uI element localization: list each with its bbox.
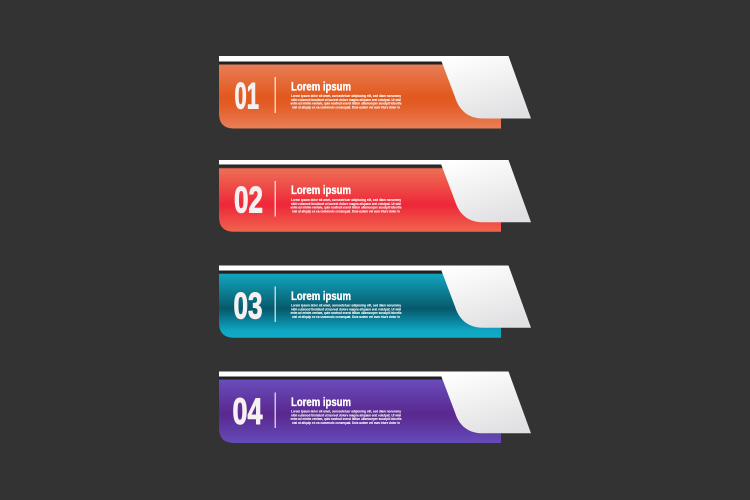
divider 01 — [274, 77, 276, 113]
white top strip 03 — [219, 266, 449, 270]
body text 01: nisl ut aliquip ex ea commodo consequat. Duis autem vel eum iriure dolor in — [292, 106, 401, 110]
white top strip 04 — [219, 372, 449, 376]
orange body 01 — [219, 64, 501, 128]
body text 03: nisl ut aliquip ex ea commodo consequat. Duis autem vel eum iriure dolor in — [292, 315, 401, 319]
body text 02: Lorem ipsum dolor sit amet, consectetuer adipiscing elit, sed diam nonummy — [291, 198, 402, 202]
heading 02: Lorem ipsum — [291, 185, 351, 197]
white flap 02 — [440, 160, 531, 222]
divider 04 — [274, 392, 276, 428]
body text 04: enim ad minim veniam, quis nostrud exerci tation ullamcorper suscipit lobortis — [290, 417, 402, 421]
dark shadow strip 03 — [219, 270, 442, 274]
panel: banner 01 — [219, 56, 531, 128]
red body 02 — [219, 168, 501, 232]
body text 01 — [290, 94, 402, 110]
body text 04: nibh euismod tincidunt ut laoreet dolore magna aliquam erat volutpat. Ut wisi — [291, 413, 401, 417]
body text 04 — [290, 410, 402, 425]
white flap 03 — [440, 266, 531, 328]
heading 03: Lorem ipsum — [291, 291, 351, 303]
body text 01: enim ad minim veniam, quis nostrud exerci tation ullamcorper suscipit lobortis — [290, 102, 402, 106]
body text 02: enim ad minim veniam, quis nostrud exerci tation ullamcorper suscipit lobortis — [290, 206, 402, 210]
dark shadow strip 04 — [219, 376, 442, 380]
white flap 04 — [440, 372, 531, 433]
number 01: 01 — [234, 76, 259, 116]
body text 01: Lorem ipsum dolor sit amet, consectetuer adipiscing elit, sed diam nonummy — [291, 94, 402, 98]
body text 02 — [290, 198, 402, 214]
divider 02 — [274, 181, 276, 216]
dark shadow strip 02 — [219, 164, 442, 166]
body text 03: nibh euismod tincidunt ut laoreet dolore magna aliquam erat volutpat. Ut wisi — [291, 307, 401, 311]
divider 03 — [274, 286, 276, 322]
teal body 03 — [219, 274, 501, 338]
body text 03: enim ad minim veniam, quis nostrud exerci tation ullamcorper suscipit lobortis — [290, 311, 402, 315]
panel: banner 04 — [219, 372, 531, 443]
white flap 01 — [440, 56, 531, 118]
panel: banner 03 — [219, 266, 531, 338]
body text 03 — [290, 304, 402, 319]
white top strip 02 — [219, 160, 449, 164]
dark shadow strip 01 — [219, 62, 442, 64]
purple body 04 — [219, 380, 501, 443]
number 04: 04 — [232, 391, 263, 432]
body text 04: nisl ut aliquip ex ea commodo consequat. Duis autem vel eum iriure dolor in — [292, 421, 401, 425]
body text 02: nisl ut aliquip ex ea commodo consequat. Duis autem vel eum iriure dolor in — [292, 210, 401, 214]
body text 02: nibh euismod tincidunt ut laoreet dolore magna aliquam erat volutpat. Ut wisi — [291, 202, 401, 206]
body text 04: Lorem ipsum dolor sit amet, consectetuer adipiscing elit, sed diam nonummy — [291, 410, 402, 414]
number 02: 02 — [234, 180, 263, 220]
panel: banner 02 — [219, 160, 531, 232]
body text 01: nibh euismod tincidunt ut laoreet dolore magna aliquam erat volutpat. Ut wisi — [291, 98, 401, 102]
heading 04: Lorem ipsum — [291, 397, 351, 409]
body text 03: Lorem ipsum dolor sit amet, consectetuer adipiscing elit, sed diam nonummy — [291, 304, 402, 308]
heading 01: Lorem ipsum — [291, 82, 351, 94]
number 03: 03 — [234, 286, 262, 326]
white top strip 01 — [219, 56, 449, 62]
